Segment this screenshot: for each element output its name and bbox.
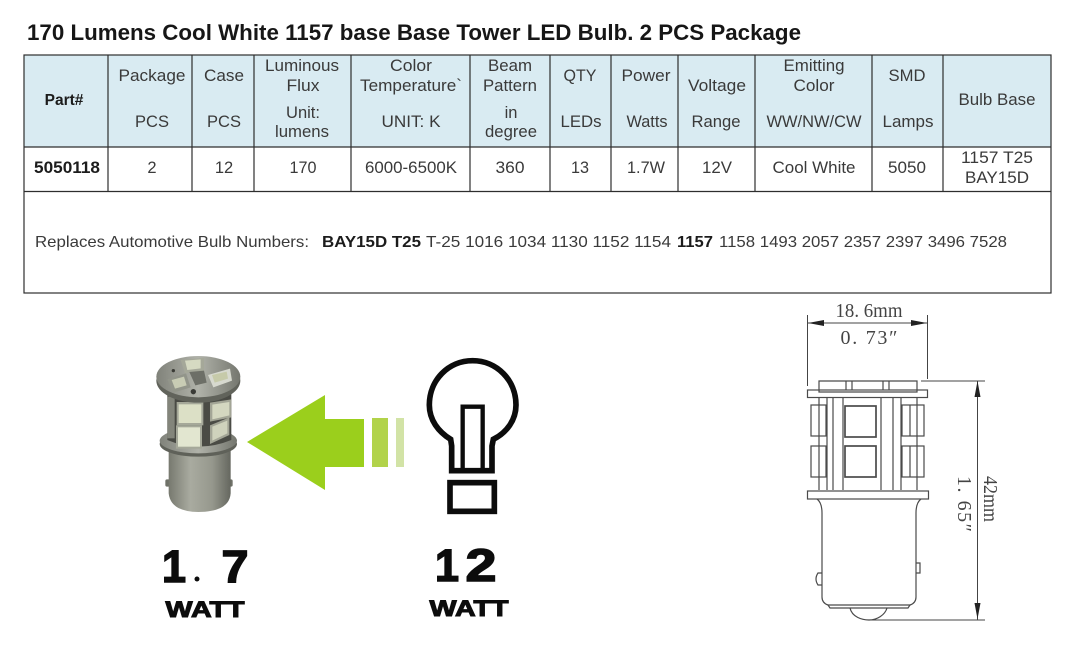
table data row: 6000-6500K xyxy=(365,159,457,177)
height labels: 42mm xyxy=(979,476,1001,522)
bulb outline xyxy=(808,381,928,620)
table header labels: degree xyxy=(485,123,537,141)
icon: LED tower bulb xyxy=(156,356,240,512)
replaces text: T-25 1016 1034 1130 1152 1154 xyxy=(426,234,671,251)
table data row: 12 xyxy=(215,159,233,177)
top LEDs xyxy=(181,358,204,373)
table header labels: Beam xyxy=(488,57,532,75)
dimension arrows xyxy=(808,320,980,619)
table header labels: LEDs xyxy=(560,113,602,131)
table header labels: PCS xyxy=(135,113,169,131)
body xyxy=(167,390,231,447)
power comparison graphic xyxy=(156,356,516,622)
dimension lines xyxy=(808,315,985,620)
specification table xyxy=(24,55,1051,293)
table header labels: Temperature` xyxy=(360,77,462,95)
table data row: Cool White xyxy=(772,159,856,177)
table header labels: lumens xyxy=(275,123,329,141)
table data row: 12V xyxy=(702,159,732,177)
table header labels: Case xyxy=(204,67,244,85)
table header labels: in xyxy=(505,104,517,122)
table data row: 2 xyxy=(147,159,157,177)
table data row: 1.7W xyxy=(627,159,665,177)
replaces text: 1158 1493 2057 2357 2397 3496 7528 xyxy=(719,234,1007,251)
label: 12 watt: WATT xyxy=(430,596,509,621)
table header background xyxy=(24,55,1051,147)
arrow: green direction arrow xyxy=(247,395,404,490)
label: 12 watt xyxy=(430,540,509,621)
table header labels: Color xyxy=(390,57,433,75)
replaces text xyxy=(35,234,1007,251)
label: 1.7 watt: 1 xyxy=(162,541,186,592)
width labels: 18. 6mm xyxy=(836,300,903,322)
table header labels: Lamps xyxy=(882,113,934,131)
table header labels: Power xyxy=(622,67,671,85)
title: 170 Lumens Cool White 1157 base Base Tower LED Bulb. 2 PCS Package xyxy=(27,20,801,45)
label: 1.7 watt: 7 xyxy=(222,541,248,592)
table data row: 1157 T25 xyxy=(961,149,1033,167)
table header labels: SMD xyxy=(888,67,926,85)
table data row: 360 xyxy=(496,159,524,177)
dimension drawing: 1. 65″ xyxy=(953,476,975,532)
table header labels: Bulb Base xyxy=(958,91,1036,109)
label: 12 watt: 1 xyxy=(435,540,459,591)
label: 1.7 watt: WATT xyxy=(166,597,245,622)
label: 12 watt: 2 xyxy=(466,540,496,591)
table data row: 13 xyxy=(571,159,589,177)
table header labels: Color xyxy=(794,77,835,95)
table header labels: Range xyxy=(692,113,740,131)
table header labels: WW/NW/CW xyxy=(766,113,862,131)
pins xyxy=(165,479,171,487)
table data row xyxy=(34,149,1033,187)
dimension drawing xyxy=(808,300,1001,620)
table header labels: PCS xyxy=(207,113,241,131)
table header labels: Part# xyxy=(45,92,84,109)
table header labels: Pattern xyxy=(483,77,537,95)
side LEDs xyxy=(177,402,203,425)
table header labels: Emitting xyxy=(784,57,844,75)
replaces text: BAY15D T25 xyxy=(322,234,421,251)
table data row: BAY15D xyxy=(965,169,1029,187)
table data row: 5050118 xyxy=(34,159,100,177)
icon: incandescent bulb xyxy=(429,361,516,511)
table header labels: Flux xyxy=(286,77,320,95)
metal base xyxy=(169,450,231,512)
table header labels: Luminous xyxy=(265,57,339,75)
table header labels: Unit: xyxy=(286,104,320,122)
table data row: 170 xyxy=(290,159,316,177)
table header labels: Package xyxy=(118,67,186,85)
table header labels xyxy=(45,57,1036,141)
dimension drawing: 0. 73″ xyxy=(840,327,898,349)
table data row: 5050 xyxy=(888,159,926,177)
top disc xyxy=(156,359,240,403)
table header labels: Watts xyxy=(626,113,668,131)
label: 1.7 watt xyxy=(162,541,248,622)
replaces text: Replaces Automotive Bulb Numbers: xyxy=(35,234,309,251)
table header labels: UNIT: K xyxy=(382,113,440,131)
table header labels: Voltage xyxy=(688,77,746,95)
lower disc xyxy=(160,431,237,457)
replaces text: 1157 xyxy=(677,234,713,251)
table header labels: QTY xyxy=(564,67,596,85)
